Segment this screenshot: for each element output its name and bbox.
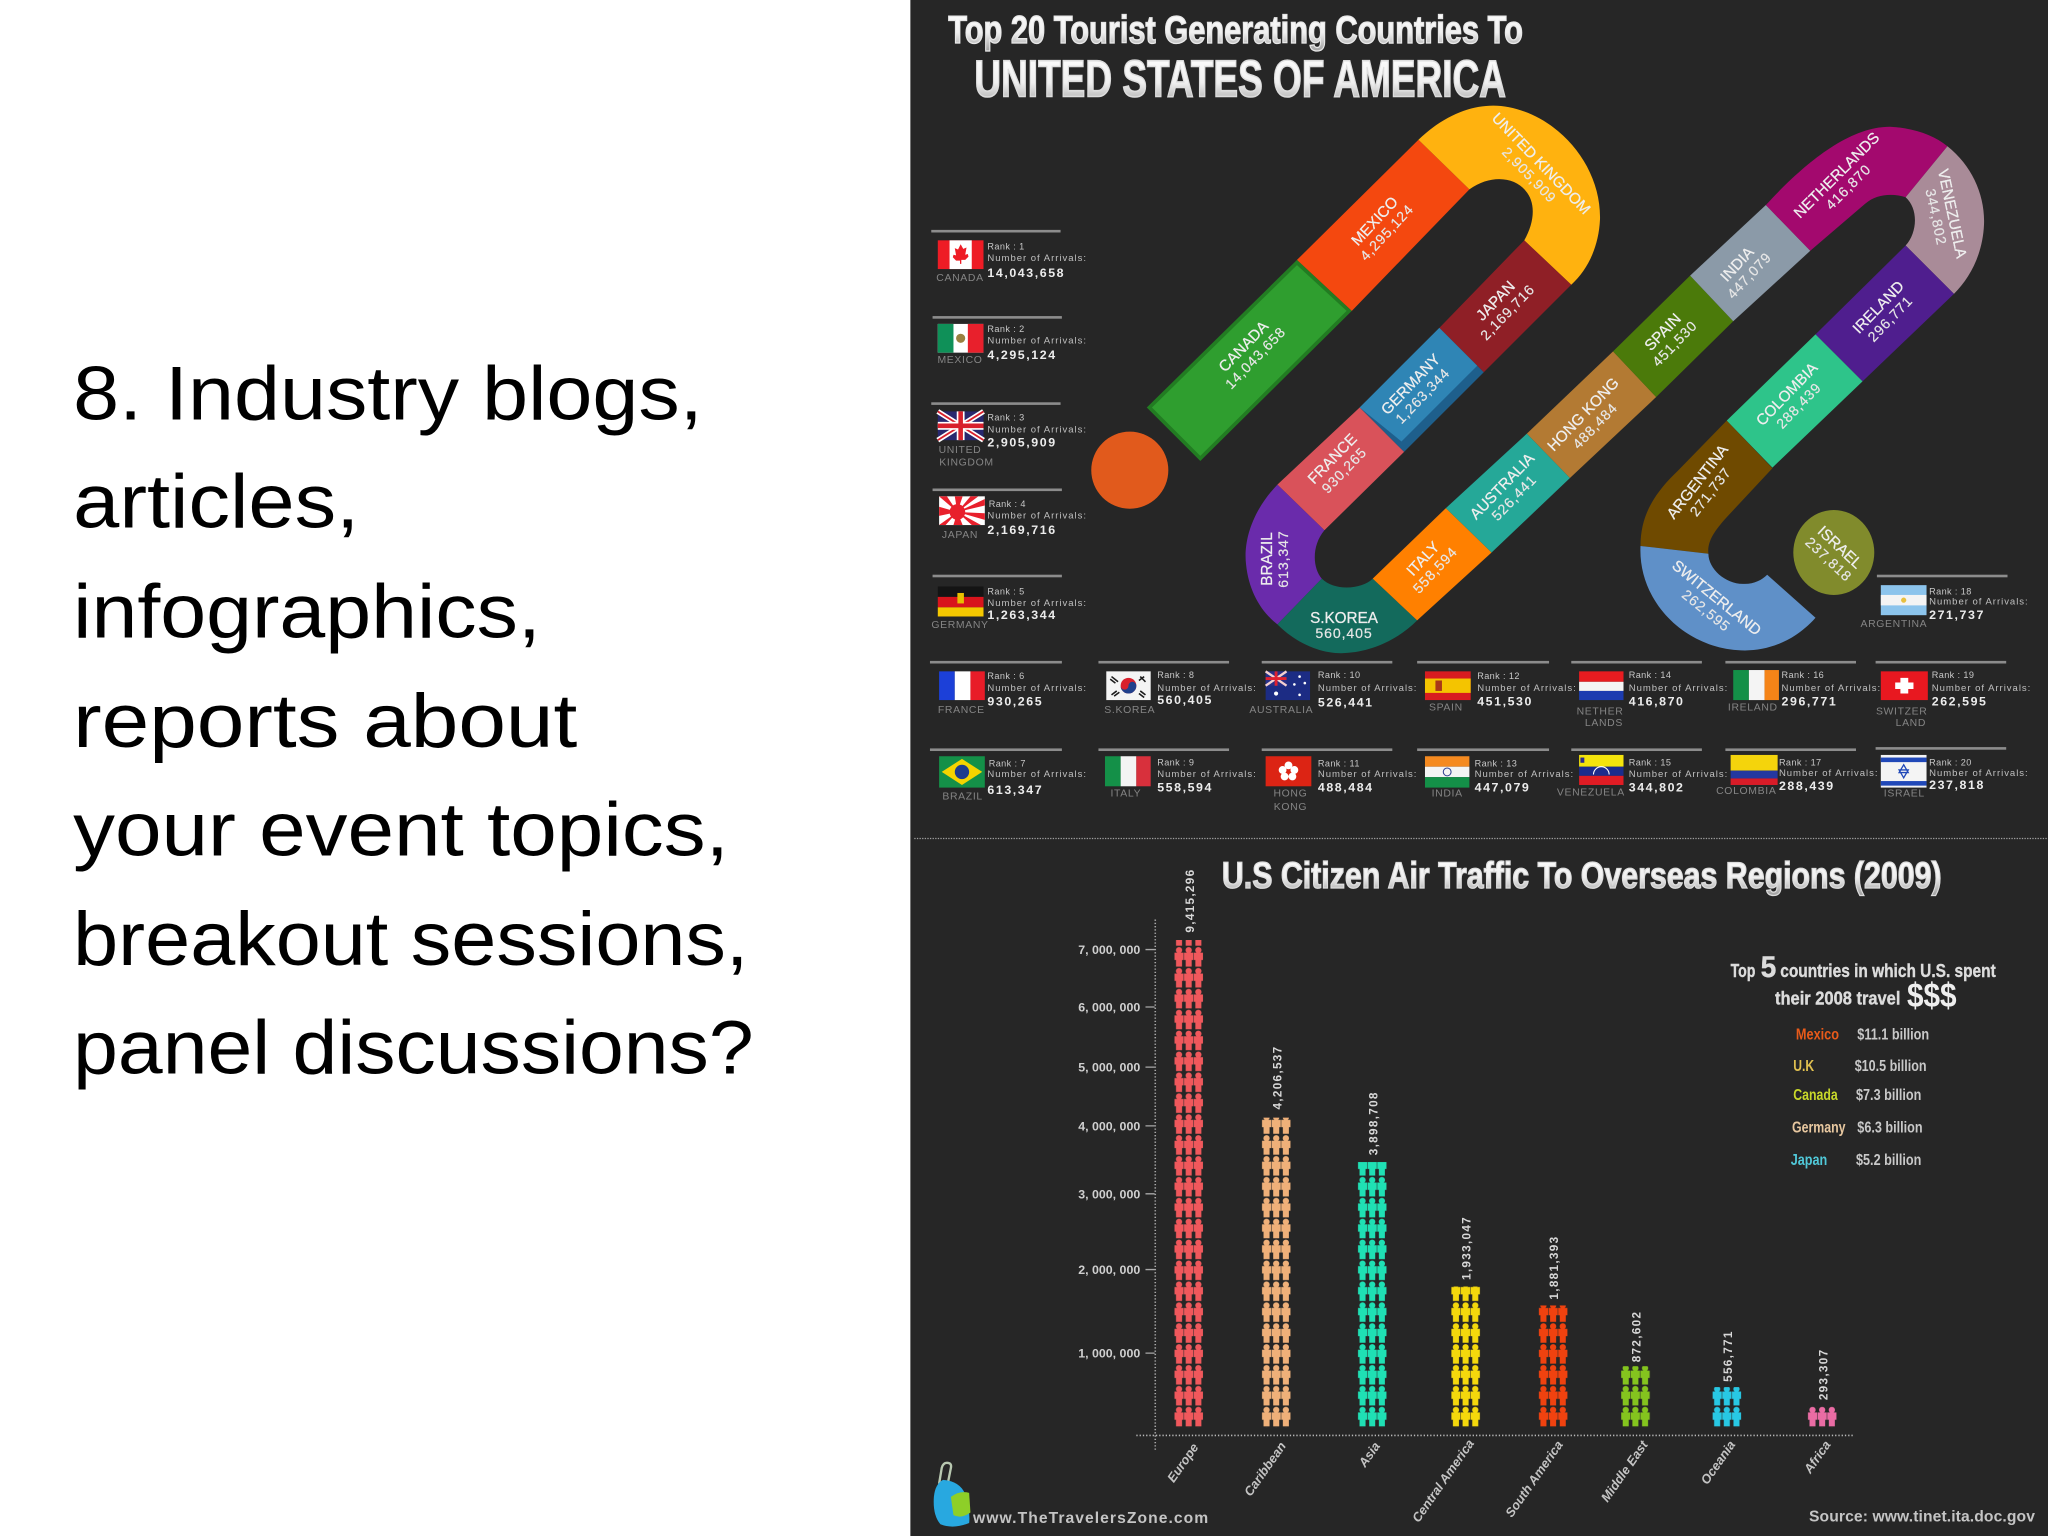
segment: India: INDIA: [1717, 243, 1758, 285]
flag card: Switzerland: [1876, 661, 2031, 729]
flag card: India: Number of Arrivals:: [1475, 769, 1574, 780]
slide text: question 8: 8. Industry blogs,: [73, 351, 703, 436]
flag card: United Kingdom: KINGDOM: [939, 458, 994, 469]
flag card: Brazil: BRAZIL: [942, 791, 983, 802]
flag card: France: Rank : 6: [987, 671, 1025, 681]
x axis: [1136, 1434, 1855, 1436]
segment: Netherlands: [1766, 127, 1947, 251]
segment: Hong Kong: 488,484: [1569, 400, 1621, 452]
bar: Africa: Africa: [1800, 1438, 1834, 1477]
flag card: Argentina: [1860, 575, 2029, 630]
segment: Netherlands: NETHERLANDS: [1791, 129, 1883, 222]
section divider: [914, 838, 2048, 840]
flag card: Australia: AUSTRALIA: [1249, 705, 1313, 716]
segment: Venezuela: VENEZUELA: [1934, 168, 1970, 261]
flag card: Argentina: 271,737: [1929, 608, 1985, 622]
flag card: Brazil: Rank : 7: [989, 759, 1026, 769]
flag card: Venezuela: [1557, 748, 1728, 798]
y axis: [1078, 920, 1155, 1450]
flag card: Venezuela: 344,802: [1629, 781, 1685, 795]
flag card: Switzerland: Rank : 19: [1932, 670, 1974, 680]
segment: United Kingdom: 2,905,909: [1499, 144, 1560, 206]
flag card: Netherlands: Number of Arrivals:: [1629, 683, 1728, 694]
segment: Hong Kong: [1527, 351, 1656, 478]
segment: Colombia: 288,439: [1773, 379, 1824, 432]
flag card: United Kingdom: Rank : 3: [987, 413, 1025, 423]
flag card: Germany: GERMANY: [931, 620, 989, 631]
flag card: United Kingdom: UNITED: [939, 445, 981, 456]
flag card: S.Korea: 560,405: [1157, 693, 1213, 707]
slide text: question 8: your event topics,: [73, 788, 729, 873]
flag card: Brazil: [930, 748, 1087, 802]
segment: S.Korea: [1277, 579, 1417, 653]
flag card: Mexico: Number of Arrivals:: [987, 336, 1087, 347]
segment: Netherlands: 416,870: [1822, 161, 1874, 213]
top 5 spending table: $7.3 billion: [1856, 1087, 1921, 1104]
segment: Argentina: 271,737: [1686, 464, 1734, 519]
top 5 spending table: U.K: [1793, 1058, 1815, 1075]
segment: Spain: [1613, 276, 1733, 397]
flag card: Ireland: [1725, 661, 1881, 714]
flag card: Mexico: Rank : 2: [987, 324, 1025, 334]
top 5 spending table: countries in which U.S. spent: [1780, 960, 1996, 981]
segment: Germany: 1,263,344: [1392, 365, 1453, 427]
segment: Spain: SPAIN: [1642, 310, 1685, 354]
segment: Spain: 451,530: [1649, 317, 1700, 370]
y axis: 2, 000, 000: [1078, 1263, 1140, 1277]
bar: Europe: [1164, 869, 1203, 1485]
flag card: S.Korea: [1098, 661, 1257, 716]
segment: Venezuela: [1906, 146, 1984, 294]
flag card: Spain: Rank : 12: [1477, 671, 1520, 681]
icon: luggage: [934, 1463, 970, 1527]
flag card: Venezuela: VENEZUELA: [1557, 787, 1625, 798]
top 5 spending table: $$$: [1907, 977, 1957, 1015]
infographic title: [948, 9, 1523, 109]
flag card: Canada: Rank : 1: [987, 241, 1025, 251]
flag card: France: 930,265: [987, 694, 1043, 708]
flag card: Spain: 451,530: [1477, 694, 1533, 708]
flag card: Italy: Number of Arrivals:: [1157, 769, 1257, 780]
segment: India: 447,079: [1724, 249, 1775, 302]
segment: Colombia: COLOMBIA: [1753, 359, 1822, 429]
bar: South America: [1502, 1236, 1568, 1520]
flag card: Mexico: 4,295,124: [987, 348, 1057, 362]
snake board path: [1091, 106, 1984, 653]
flag card: Switzerland: 262,595: [1932, 694, 1988, 708]
flag card: Ireland: Rank : 16: [1782, 670, 1824, 680]
segment: Mexico: [1297, 140, 1469, 311]
bar: South America: 1,881,393: [1548, 1236, 1561, 1300]
footer source: Source: www.tinet.ita.doc.gov: [1809, 1509, 2035, 1526]
flag card: India: INDIA: [1432, 789, 1463, 800]
segment: Australia: 526,441: [1488, 471, 1540, 524]
y axis: 1, 000, 000: [1078, 1347, 1140, 1361]
y axis: 3, 000, 000: [1078, 1187, 1140, 1201]
flag card: S.Korea: Rank : 8: [1157, 670, 1194, 680]
flag card: Brazil: Number of Arrivals:: [987, 769, 1087, 780]
flag card: Argentina: Rank : 18: [1929, 586, 1972, 596]
flag card: Venezuela: Rank : 15: [1629, 757, 1671, 767]
flag card: Argentina: ARGENTINA: [1860, 619, 1927, 630]
segment: India: [1690, 205, 1810, 321]
flag card: Argentina: Number of Arrivals:: [1929, 597, 2029, 608]
flag card: Italy: 558,594: [1157, 781, 1213, 795]
segment: Australia: AUSTRALIA: [1467, 450, 1539, 523]
segment: Canada: CANADA: [1216, 317, 1273, 376]
segment: France: [1277, 408, 1404, 530]
segment: Mexico: MEXICO: [1348, 194, 1402, 249]
flag card: Italy: [1098, 748, 1257, 800]
segment: Israel: 237,818: [1802, 534, 1855, 585]
flag card: Colombia: [1716, 748, 1878, 797]
y axis: 6, 000, 000: [1078, 1001, 1140, 1015]
flag card: Germany: Rank : 5: [987, 586, 1025, 596]
segment: Argentina: [1640, 421, 1772, 554]
segment: Hong Kong: HONG KONG: [1544, 375, 1623, 455]
slide text: question 8: infographics,: [73, 569, 541, 654]
flag card: Canada: CANADA: [936, 273, 984, 284]
segment: Brazil: 613,347: [1275, 530, 1291, 588]
flag card: Canada: Number of Arrivals:: [987, 253, 1087, 264]
flag card: S.Korea: Number of Arrivals:: [1157, 683, 1257, 694]
flag card: Israel: Number of Arrivals:: [1929, 768, 2029, 779]
y axis: 4, 000, 000: [1078, 1119, 1140, 1133]
flag card: Spain: SPAIN: [1429, 703, 1463, 714]
flag card: Israel: Rank : 20: [1929, 757, 1972, 767]
flag card: France: FRANCE: [938, 705, 985, 716]
bar: Asia: Asia: [1355, 1439, 1383, 1471]
segment: United Kingdom: UNITED KINGDOM: [1488, 110, 1593, 218]
flag card: Germany: 1,263,344: [987, 608, 1057, 622]
flag card: Switzerland: LAND: [1896, 718, 1926, 729]
bar: Africa: 293,307: [1817, 1349, 1830, 1400]
flag card: Japan: 2,169,716: [987, 523, 1057, 537]
flag card: Hong Kong: [1262, 748, 1417, 813]
flag card: Spain: [1417, 661, 1577, 714]
bar: Central America: Central America: [1409, 1436, 1477, 1525]
bar: Europe: Europe: [1164, 1440, 1201, 1485]
flag card: Australia: Number of Arrivals:: [1318, 683, 1417, 694]
flag card: Ireland: 296,771: [1782, 694, 1837, 708]
segment: Canada: [1147, 260, 1352, 461]
flag card: France: Number of Arrivals:: [987, 683, 1087, 694]
panel: infographic: [910, 0, 2048, 1536]
segment: Israel: [1793, 510, 1874, 595]
flag card: Israel: [1876, 747, 2029, 800]
flag card: Hong Kong: Number of Arrivals:: [1318, 769, 1417, 780]
segment: Mexico: 4,295,124: [1357, 201, 1417, 264]
flag card: Australia: [1249, 661, 1417, 716]
flag card: Switzerland: SWITZER: [1876, 706, 1927, 717]
infographic title: Top 20 Tourist Generating Countries To: [948, 9, 1523, 52]
pictogram bar chart: [1078, 869, 1855, 1525]
flag card: Japan: Number of Arrivals:: [987, 511, 1087, 522]
top 5 spending table: Top: [1731, 960, 1755, 981]
y axis: 5, 000, 000: [1078, 1061, 1140, 1075]
segment: Venezuela: 344,802: [1922, 187, 1950, 247]
flag card: Hong Kong: 488,484: [1318, 781, 1374, 795]
flag card: Netherlands: [1571, 661, 1728, 729]
bar: Central America: [1409, 1216, 1480, 1525]
flag card: Germany: Number of Arrivals:: [987, 598, 1087, 609]
bar: Asia: [1355, 1091, 1387, 1471]
segment: Japan: JAPAN: [1473, 278, 1519, 324]
segment: Japan: [1439, 240, 1571, 372]
bar: Africa: [1800, 1349, 1837, 1477]
bar: Caribbean: [1241, 1046, 1291, 1499]
flag card: France: [930, 661, 1087, 716]
flag card: Hong Kong: KONG: [1274, 802, 1307, 813]
flag card: United Kingdom: [931, 402, 1087, 469]
flag card: Brazil: 613,347: [987, 783, 1043, 797]
flag card: Canada: [931, 230, 1087, 284]
bar: Europe: 9,415,296: [1184, 869, 1197, 933]
segment: Italy: 558,594: [1410, 544, 1460, 596]
top 5 spending table: $5.2 billion: [1856, 1152, 1921, 1169]
segment: S.Korea: 560,405: [1315, 625, 1373, 641]
bar: Middle East: [1598, 1311, 1651, 1505]
segment: Japan: 2,169,716: [1477, 281, 1538, 343]
top 5 spending table: [1731, 951, 1996, 1169]
flag card: S.Korea: S.KOREA: [1104, 705, 1155, 716]
slide text: question 8: articles,: [73, 460, 359, 545]
segment: Australia: [1446, 434, 1570, 552]
flag card: Japan: [933, 488, 1087, 541]
flag card: Hong Kong: HONG: [1273, 789, 1307, 800]
flag card: India: Rank : 13: [1475, 759, 1517, 769]
segment: Brazil: BRAZIL: [1259, 532, 1276, 586]
segment: Brazil: [1246, 485, 1324, 624]
flag card: Switzerland: Number of Arrivals:: [1932, 683, 2031, 694]
flag card: Colombia: Rank : 17: [1779, 757, 1822, 767]
top 5 spending table: $11.1 billion: [1857, 1027, 1929, 1044]
slide text: question 8: [73, 351, 754, 1091]
slide text: question 8: breakout sessions,: [73, 897, 748, 982]
segment: Colombia: [1727, 334, 1863, 468]
top 5 spending table: 5: [1761, 951, 1776, 984]
flag card: Australia: Rank : 10: [1318, 670, 1360, 680]
footer website: www.TheTravelersZone.com: [972, 1510, 1208, 1527]
flag card: Germany: [931, 575, 1087, 631]
segment: Argentina: ARGENTINA: [1664, 441, 1732, 522]
top 5 spending table: their 2008 travel: [1775, 987, 1900, 1008]
flag card: Spain: Number of Arrivals:: [1477, 683, 1577, 694]
segment: Italy: [1373, 508, 1492, 620]
bar: Caribbean: Caribbean: [1241, 1439, 1289, 1499]
bar: Asia: 3,898,708: [1367, 1091, 1380, 1155]
flag card: Colombia: COLOMBIA: [1716, 786, 1776, 797]
flag card: Netherlands: LANDS: [1585, 718, 1623, 729]
flag card: Australia: 526,441: [1318, 696, 1374, 710]
flag card: Netherlands: NETHER: [1577, 706, 1623, 717]
slide text: question 8: reports about: [73, 679, 577, 764]
flag card: Colombia: 288,439: [1779, 779, 1835, 793]
start circle: [1091, 432, 1168, 509]
bar: Oceania: Oceania: [1697, 1438, 1738, 1487]
flag card: Netherlands: 416,870: [1629, 694, 1685, 708]
top 5 spending table: $10.5 billion: [1855, 1058, 1927, 1075]
segment: France: FRANCE: [1305, 431, 1361, 488]
flag card: Japan: JAPAN: [942, 530, 978, 541]
segment: Switzerland: SWITZERLAND: [1668, 557, 1764, 639]
flag card: Israel: 237,818: [1929, 778, 1985, 792]
bar: Oceania: 556,771: [1722, 1330, 1735, 1382]
flag card: United Kingdom: Number of Arrivals:: [987, 424, 1087, 435]
segment: Israel: ISRAEL: [1814, 523, 1865, 572]
bar: Middle East: 872,602: [1630, 1311, 1643, 1362]
flag card: Mexico: MEXICO: [937, 355, 983, 366]
flag card: Ireland: Number of Arrivals:: [1782, 683, 1881, 694]
top 5 spending table: Mexico: [1796, 1027, 1839, 1044]
flag card: Colombia: Number of Arrivals:: [1779, 768, 1878, 779]
top 5 spending table: Canada: [1793, 1087, 1838, 1104]
segment: France: 930,265: [1318, 444, 1370, 496]
flag card: Hong Kong: Rank : 11: [1318, 759, 1360, 769]
segment: Ireland: IRELAND: [1850, 278, 1908, 337]
segment: Germany: GERMANY: [1378, 351, 1444, 418]
segment: S.Korea: S.KOREA: [1310, 610, 1379, 627]
flag card: Italy: ITALY: [1111, 789, 1141, 800]
top 5 spending table: Germany: [1792, 1119, 1846, 1136]
segment: United Kingdom: [1418, 106, 1600, 285]
segment: Germany: [1360, 328, 1484, 452]
bar: Middle East: Middle East: [1598, 1437, 1651, 1505]
flag card: Venezuela: Number of Arrivals:: [1629, 769, 1728, 780]
flag card: Japan: Rank : 4: [989, 499, 1026, 509]
segment: Ireland: [1816, 246, 1954, 381]
bar: Oceania: [1697, 1330, 1742, 1487]
bar: South America: South America: [1502, 1438, 1566, 1520]
flag card: Canada: 14,043,658: [987, 266, 1065, 280]
flag card: Netherlands: Rank : 14: [1629, 670, 1671, 680]
flag card: Ireland: IRELAND: [1728, 703, 1778, 714]
bar: Caribbean: 4,206,537: [1271, 1046, 1284, 1110]
segment: Ireland: 296,771: [1864, 292, 1916, 345]
flag card: United Kingdom: 2,905,909: [987, 436, 1057, 450]
segment: Switzerland: 262,595: [1679, 586, 1734, 635]
flag card: Italy: Rank : 9: [1157, 757, 1194, 767]
flag card: Mexico: [933, 316, 1087, 366]
flag card: Israel: ISRAEL: [1884, 789, 1925, 800]
bar: Central America: 1,933,047: [1461, 1216, 1474, 1280]
slide text: question 8: panel discussions?: [73, 1006, 754, 1091]
infographic title: UNITED STATES OF AMERICA: [974, 51, 1506, 109]
segment: Italy: ITALY: [1403, 539, 1443, 580]
top 5 spending table: $6.3 billion: [1857, 1119, 1923, 1136]
top 5 spending table: Japan: [1791, 1152, 1827, 1169]
flag card: India: [1417, 748, 1574, 800]
y axis: 7, 000, 000: [1078, 943, 1140, 957]
segment: Canada: 14,043,658: [1222, 324, 1289, 392]
flag card: India: 447,079: [1475, 781, 1530, 795]
segment: Switzerland: [1640, 546, 1816, 651]
